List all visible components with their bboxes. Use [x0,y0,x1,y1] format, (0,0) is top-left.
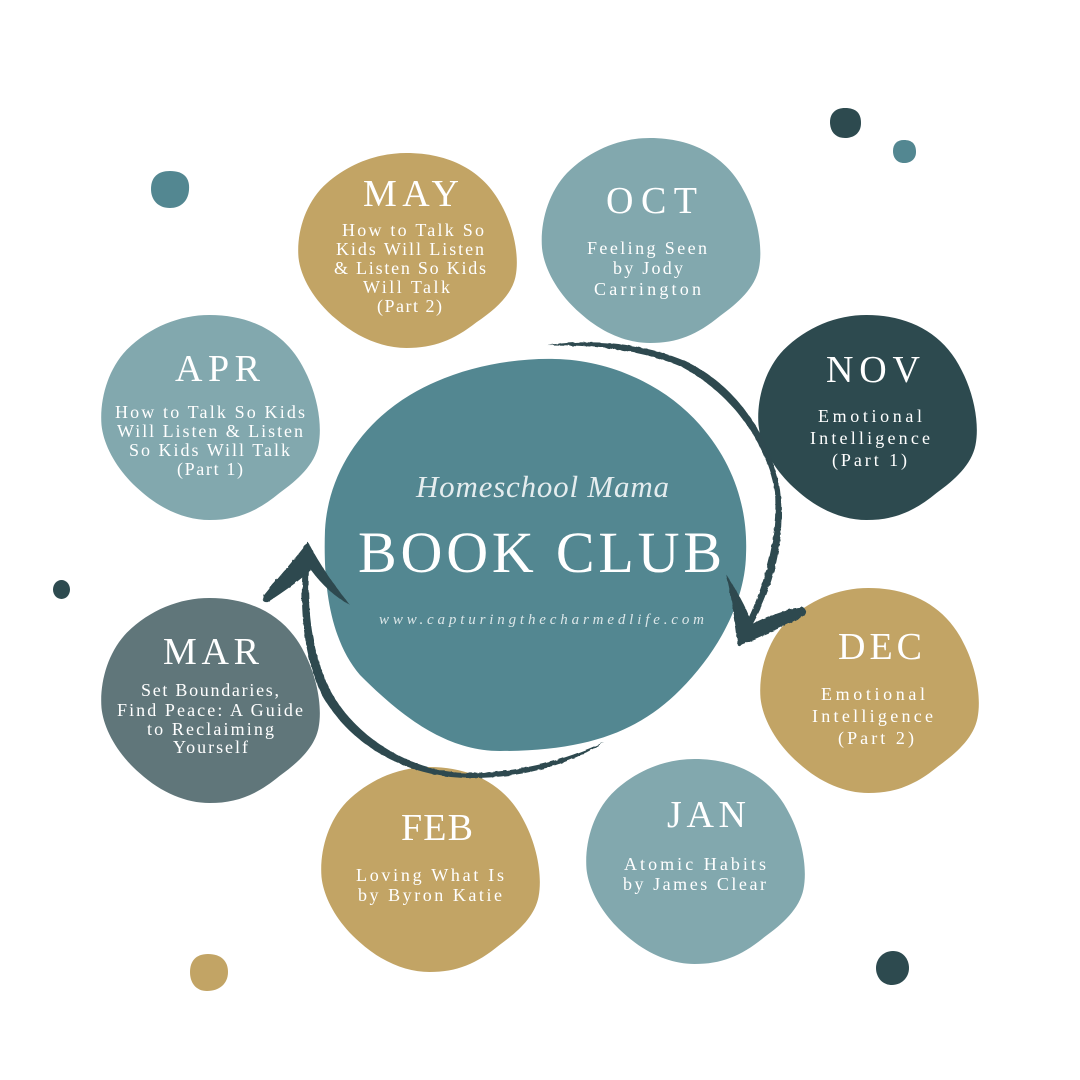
month panel: December: (Part 2) [838,728,914,749]
month panel: April: How to Talk So Kids [115,402,305,422]
month panel: May: MAY [363,173,459,215]
month panel: January: JAN [667,794,746,836]
month panel: November: NOV [826,349,921,391]
decorative dot: dark bottom right [876,951,909,985]
month panel: March: Set Boundaries, [141,680,279,700]
month panel: October: by Jody [613,258,683,278]
month panel: February: by Byron Katie [358,885,502,905]
month panel: November: Emotional [818,406,922,426]
month panel: October [542,138,760,343]
month panel: April: Will Listen & Listen [117,421,303,441]
month panel: December: Intelligence [812,706,933,726]
month panel: October: Feeling Seen [587,238,707,258]
center panel: book club title [325,359,746,751]
decorative dot: teal upper left [151,171,189,208]
month panel: April: (Part 1) [177,459,243,480]
month panel: March: Yourself [173,737,248,757]
arrow: upper right arc [547,342,806,646]
script heading: Homeschool Mama [415,469,669,504]
main title: BOOK CLUB [358,520,722,585]
month panel: March: MAR [163,631,260,673]
month panel: January: by James Clear [623,874,766,894]
month panel: April [101,315,320,520]
decorative dot: small dark left [53,580,70,599]
month panel: January [586,759,805,964]
month panel: February [321,767,540,972]
month panel: February: Loving What Is [356,865,504,885]
month panel: November [758,315,977,520]
month panel: May [298,153,517,348]
month panel: April: APR [175,348,261,390]
month panel: April: So Kids Will Talk [129,440,290,460]
month panel: January: Atomic Habits [624,854,766,874]
month panel: November: Intelligence [810,428,930,448]
month panel: March: to Reclaiming [147,719,274,739]
month panel: November: (Part 1) [832,450,907,471]
month panel: December: DEC [838,626,922,668]
arrow: lower left arc [263,542,604,778]
month panel: December [760,588,979,793]
month panel: May: How to Talk So [342,220,484,240]
month panel: May: (Part 2) [377,296,442,317]
month panel: May: & Listen So Kids [334,258,486,278]
month panel: February: FEB [401,807,473,849]
month panel: March: Find Peace: A Guide [117,700,303,720]
month panel: May: Will Talk [363,277,450,297]
decorative dot: small teal upper right [893,140,916,163]
month panel: December: Emotional [821,684,925,704]
month panel: October: OCT [606,180,697,222]
decorative dot: dark upper right [830,108,861,138]
website url: www.capturingthecharmedlife.com [379,612,704,628]
month panel: October: Carrington [594,279,701,299]
month panel: May: Kids Will Listen [336,239,484,259]
decorative dot: gold bottom left [190,954,228,991]
month panel: March [101,598,320,803]
